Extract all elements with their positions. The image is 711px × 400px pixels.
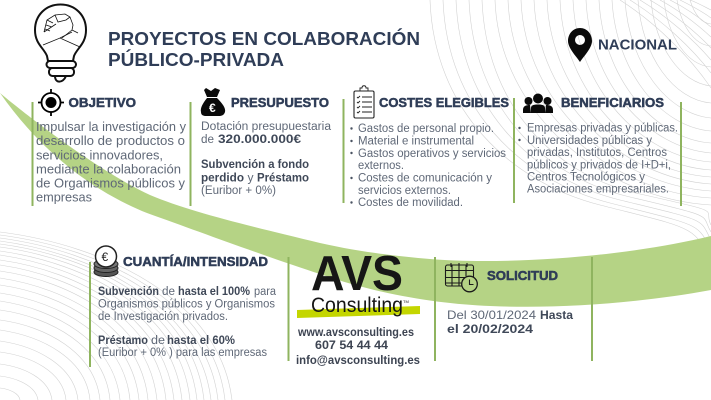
title	[108, 28, 420, 70]
text: presupuesto body: 320.000.000€	[218, 134, 302, 146]
text: presupuesto body: y	[248, 172, 254, 184]
list: costes: Gastos operativos y servicios	[358, 148, 506, 160]
icon: money bag	[201, 88, 225, 116]
text: objetivo body: mediante la colaboración	[36, 162, 181, 176]
heading: beneficiarios: BENEFICIARIOS	[561, 96, 664, 110]
heading: presupuesto: PRESUPUESTO	[231, 96, 329, 110]
text: presupuesto body: de	[201, 134, 214, 146]
logo: AVS Consulting	[297, 247, 420, 318]
heading: cuantía: CUANTÍA/INTENSIDAD	[123, 254, 268, 269]
icon: checklist clipboard	[354, 86, 374, 118]
list: costes: externos.	[358, 160, 404, 172]
panel: cuantía	[90, 246, 277, 367]
text: objetivo body	[36, 120, 187, 204]
list: beneficiarios: Asociaciones empresariales.	[527, 184, 669, 196]
heading: costes elegibles: COSTES ELEGIBLES	[379, 96, 509, 110]
title: PROYECTOS EN COLABORACIÓN	[108, 28, 420, 49]
green swoosh band	[0, 93, 711, 307]
panel: beneficiarios	[514, 94, 681, 206]
logo: AVS Consulting: TM	[403, 299, 409, 304]
list: beneficiarios: privadas, Institutos, Centros	[527, 147, 667, 159]
text: contact details: info@avsconsulting.es	[296, 353, 420, 367]
icon: euro coins: €	[102, 250, 108, 264]
text: objetivo body: empresas	[36, 190, 92, 204]
logo: AVS Consulting: AVS	[311, 247, 403, 301]
text: contact details: www.avsconsulting.es	[297, 325, 414, 339]
heading: solicitud: SOLICITUD	[487, 269, 558, 283]
text: cuantía body: de	[162, 286, 175, 298]
icon: light bulb with handshake	[35, 4, 86, 82]
icon: people	[523, 94, 553, 113]
list: costes	[350, 123, 506, 209]
text: cuantía body	[98, 286, 277, 359]
text: objetivo body: servicios innovadores,	[36, 148, 163, 162]
heading: objetivo: OBJETIVO	[68, 96, 136, 110]
list: beneficiarios: Centros Tecnológicos y	[527, 172, 645, 184]
list: costes: Material e instrumental	[358, 136, 474, 148]
panel: presupuesto	[190, 88, 332, 206]
text: objetivo body: desarrollo de productos o	[36, 134, 185, 148]
text: cuantía body: hasta el 100%	[178, 286, 250, 298]
list: beneficiarios	[518, 122, 678, 196]
text: cuantía body: para	[254, 286, 277, 298]
list: costes: Gastos de personal propio.	[358, 123, 494, 135]
text: cuantía body: de	[151, 335, 165, 347]
panel: objetivo	[32, 89, 187, 206]
text: presupuesto body: (Euribor + 0%)	[201, 185, 276, 197]
text: cuantía body: Organismos públicos y Organismos	[98, 298, 275, 310]
icon: target	[38, 89, 64, 116]
text: cuantía body: Préstamo	[98, 335, 148, 347]
text: solicitud dates	[447, 308, 573, 336]
text: contact details: 607 54 44 44	[315, 338, 388, 352]
text: cuantía body: (Euribor + 0% ) para las empresas	[98, 347, 267, 359]
label: nacional: NACIONAL	[598, 36, 677, 54]
text: cuantía body: hasta el 60%	[167, 335, 235, 347]
text: solicitud dates: Hasta	[540, 308, 573, 322]
panel: AVS Consulting logo and contact	[288, 247, 435, 367]
panel: costes elegibles	[344, 86, 509, 209]
title: PÚBLICO-PRIVADA	[108, 49, 284, 70]
text: presupuesto body: Subvención a fondo	[201, 159, 309, 171]
text: objetivo body: de Organismos públicos y	[36, 176, 186, 190]
text: cuantía body: Subvención	[98, 286, 159, 298]
panel: solicitud	[446, 257, 592, 361]
text: presupuesto body	[201, 121, 332, 197]
icon: location pin	[568, 28, 592, 62]
list: costes: Costes de comunicación y	[358, 172, 492, 184]
list: beneficiarios: Empresas privadas y públicas.	[527, 122, 678, 134]
icon: euro coins	[94, 246, 118, 276]
logo: AVS Consulting: Consulting	[311, 294, 403, 317]
list: beneficiarios: públicos y privados de I+D+i,	[527, 160, 671, 172]
list: beneficiarios: Universidades públicas y	[527, 135, 652, 147]
list: costes: servicios externos.	[358, 185, 451, 197]
icon: money bag: €	[209, 101, 216, 115]
text: cuantía body: de Investigación privados.	[98, 311, 228, 323]
text: solicitud dates: el 20/02/2024	[447, 322, 533, 336]
icon: calendar with clock	[446, 263, 477, 292]
list: costes: Costes de movilidad.	[358, 197, 463, 209]
text: contact details	[296, 325, 420, 367]
text: presupuesto body: perdido	[201, 172, 244, 184]
text: presupuesto body: Préstamo	[257, 172, 309, 184]
text: presupuesto body: Dotación presupuestaria	[201, 121, 332, 133]
text: solicitud dates: Del 30/01/2024	[447, 308, 536, 322]
text: objetivo body: Impulsar la investigación y	[36, 120, 187, 134]
